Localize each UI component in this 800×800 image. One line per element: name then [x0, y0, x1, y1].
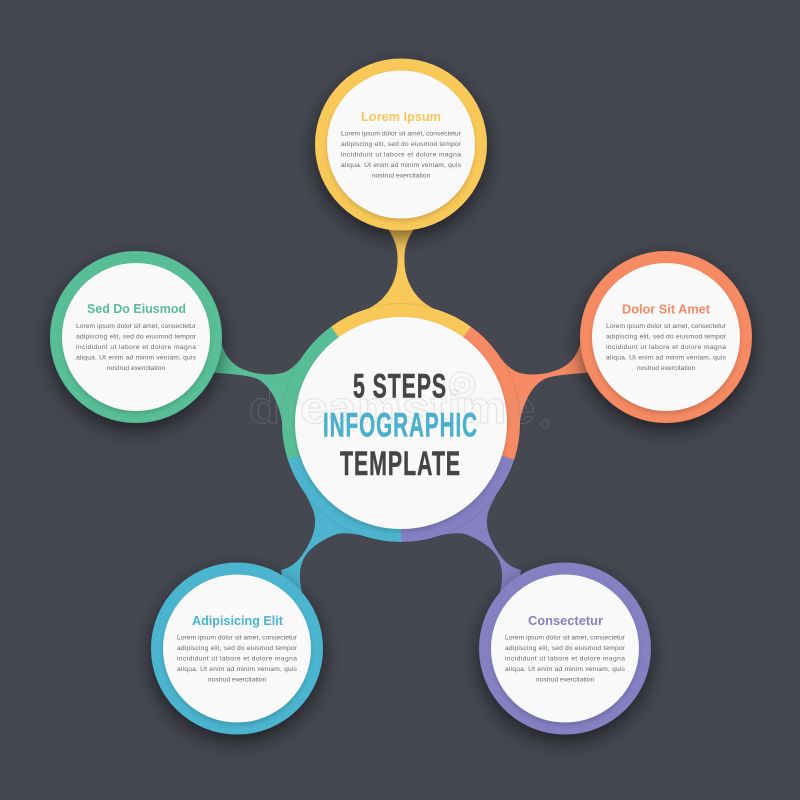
- body text: incididunt ut labore et dolore magna: [341, 152, 461, 158]
- body text: Lorem ipsum dolor sit amet, consectetur: [76, 323, 197, 330]
- body text: adipiscing elit, sed do eiusmod tempor: [505, 645, 626, 652]
- body text: nostrud exercitation: [637, 365, 695, 372]
- body text: Lorem ipsum dolor sit amet, consectetur: [341, 130, 462, 138]
- white disc: [163, 574, 311, 722]
- heading: Dolor Sit Amet: [622, 302, 711, 316]
- white disc: [491, 574, 639, 722]
- body text: aliqua. Ut enim ad minim veniam, quis: [76, 354, 197, 362]
- body text: aliqua. Ut enim ad minim veniam, quis: [606, 354, 727, 362]
- body text: incididunt ut labore et dolore magna: [177, 656, 297, 662]
- connector and ring segment: orange: [456, 320, 600, 465]
- heading: Adipisicing Elit: [192, 613, 284, 628]
- circle ring: [50, 251, 222, 423]
- panel: Dolor Sit Amet (orange): [580, 251, 752, 423]
- body text: nostrud exercitation: [107, 365, 165, 372]
- body text: [606, 323, 727, 372]
- body text: incididunt ut labore et dolore magna: [606, 344, 726, 351]
- title line: INFOGRAPHIC: INFOGRAPHIC: [323, 406, 478, 444]
- panel: Adipisicing Elit (blue): [151, 562, 323, 734]
- white disc: [592, 263, 740, 411]
- body text: adipiscing elit, sed do eiusmod tempor: [341, 141, 462, 148]
- panel: Lorem Ipsum (yellow): [315, 58, 487, 230]
- body text: nostrud exercitation: [372, 172, 430, 180]
- circle ring: [151, 562, 323, 734]
- connector and ring segment: yellow: [331, 226, 471, 345]
- panel: Consectetur (purple): [479, 562, 651, 734]
- body text: aliqua. Ut enim ad minim veniam, quis: [505, 666, 626, 673]
- white disc: [62, 263, 210, 411]
- body text: adipiscing elit, sed do eiusmod tempor: [76, 334, 197, 340]
- circle ring: [315, 58, 487, 230]
- body text: Lorem ipsum dolor sit amet, consectetur: [606, 323, 727, 330]
- body text: aliqua. Ut enim ad minim veniam, quis: [341, 162, 462, 169]
- body text: incididunt ut labore et dolore magna: [76, 344, 196, 351]
- title line: TEMPLATE: TEMPLATE: [340, 445, 461, 483]
- body text: adipiscing elit, sed do eiusmod tempor: [606, 334, 727, 340]
- body text: adipiscing elit, sed do eiusmod tempor: [177, 645, 298, 652]
- connector and ring segment: green: [202, 320, 346, 465]
- body text: [177, 634, 298, 684]
- white disc: [327, 70, 475, 218]
- body text: aliqua. Ut enim ad minim veniam, quis: [177, 666, 298, 673]
- heading: Consectetur: [528, 613, 603, 628]
- body text: [505, 634, 626, 684]
- body text: Lorem ipsum dolor sit amet, consectetur: [177, 634, 298, 642]
- title line: 5 STEPS: 5 STEPS: [353, 368, 447, 406]
- body text: [341, 130, 462, 180]
- circle ring: [580, 251, 752, 423]
- central ring with connectors: [202, 226, 600, 592]
- panel: Sed Do Eiusmod (green): [50, 251, 222, 423]
- central white circle: [295, 317, 507, 529]
- connector and ring segment: blue: [274, 447, 410, 592]
- body text: nostrud exercitation: [208, 676, 266, 684]
- body text: Lorem ipsum dolor sit amet, consectetur: [505, 634, 626, 642]
- central title: [323, 368, 478, 483]
- body text: [76, 323, 197, 372]
- heading: Sed Do Eiusmod: [87, 301, 186, 316]
- body text: incididunt ut labore et dolore magna: [505, 656, 625, 662]
- body text: nostrud exercitation: [536, 676, 594, 684]
- connector and ring segment: purple: [392, 447, 528, 592]
- circle ring: [479, 562, 651, 734]
- heading: Lorem Ipsum: [361, 109, 441, 124]
- watermark: dreamstime: [249, 382, 535, 433]
